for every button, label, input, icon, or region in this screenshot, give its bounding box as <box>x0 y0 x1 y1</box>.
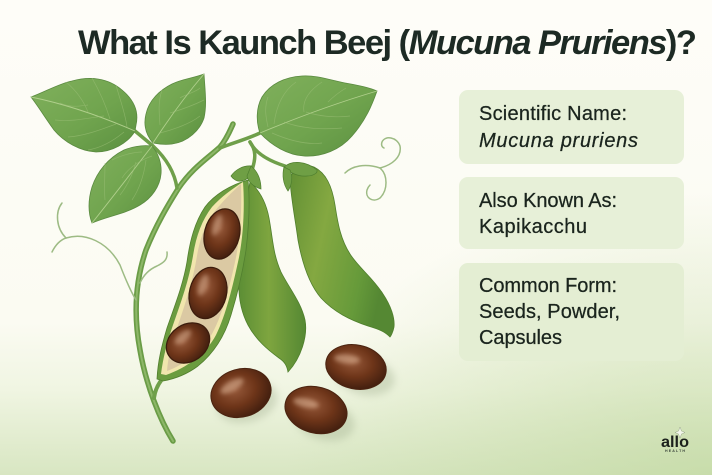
card: common form: Capsules <box>479 327 562 349</box>
calyx: open pod <box>231 166 261 189</box>
leaf: right <box>257 76 377 156</box>
seed: left <box>205 362 277 424</box>
card: also known as: Also Known As: <box>479 190 617 212</box>
logo: allo health <box>661 427 689 453</box>
seed in pod: middle <box>184 263 232 323</box>
icon: sparkle <box>675 427 685 438</box>
plant illustration <box>31 74 400 441</box>
seed shadows <box>212 351 398 447</box>
card: also known as: Kapikacchu <box>479 216 587 238</box>
closed pod: right <box>290 166 394 337</box>
card: scientific name: Mucuna pruriens <box>479 130 638 152</box>
card: scientific name: Scientific Name: <box>479 103 627 125</box>
seed in pod: top <box>199 205 245 263</box>
card: common form <box>459 263 684 361</box>
closed pod: middle <box>239 182 306 372</box>
logo: allo health: HEALTH <box>665 449 685 453</box>
pod shell <box>157 180 249 381</box>
card: common form: Common Form: <box>479 275 617 297</box>
seed in pod: bottom <box>159 315 217 371</box>
leaf: lower <box>89 146 161 223</box>
card: scientific name <box>459 90 684 164</box>
card: also known as <box>459 177 684 249</box>
open pod <box>157 180 249 381</box>
calyx: right pod <box>283 162 317 191</box>
title: What Is Kaunch Beej (Mucuna Pruriens)? <box>78 24 697 62</box>
seed: right <box>322 339 390 395</box>
loose seeds <box>205 339 398 447</box>
leaf: top middle <box>145 74 206 144</box>
seed: bottom <box>280 380 352 440</box>
tendrils <box>52 138 400 300</box>
pod interior <box>167 184 241 371</box>
pod lining <box>161 182 244 375</box>
leaf: left <box>31 78 137 152</box>
main stem <box>135 124 285 441</box>
card: common form: Seeds, Powder, <box>479 301 620 323</box>
logo: allo health: allo <box>661 434 689 451</box>
